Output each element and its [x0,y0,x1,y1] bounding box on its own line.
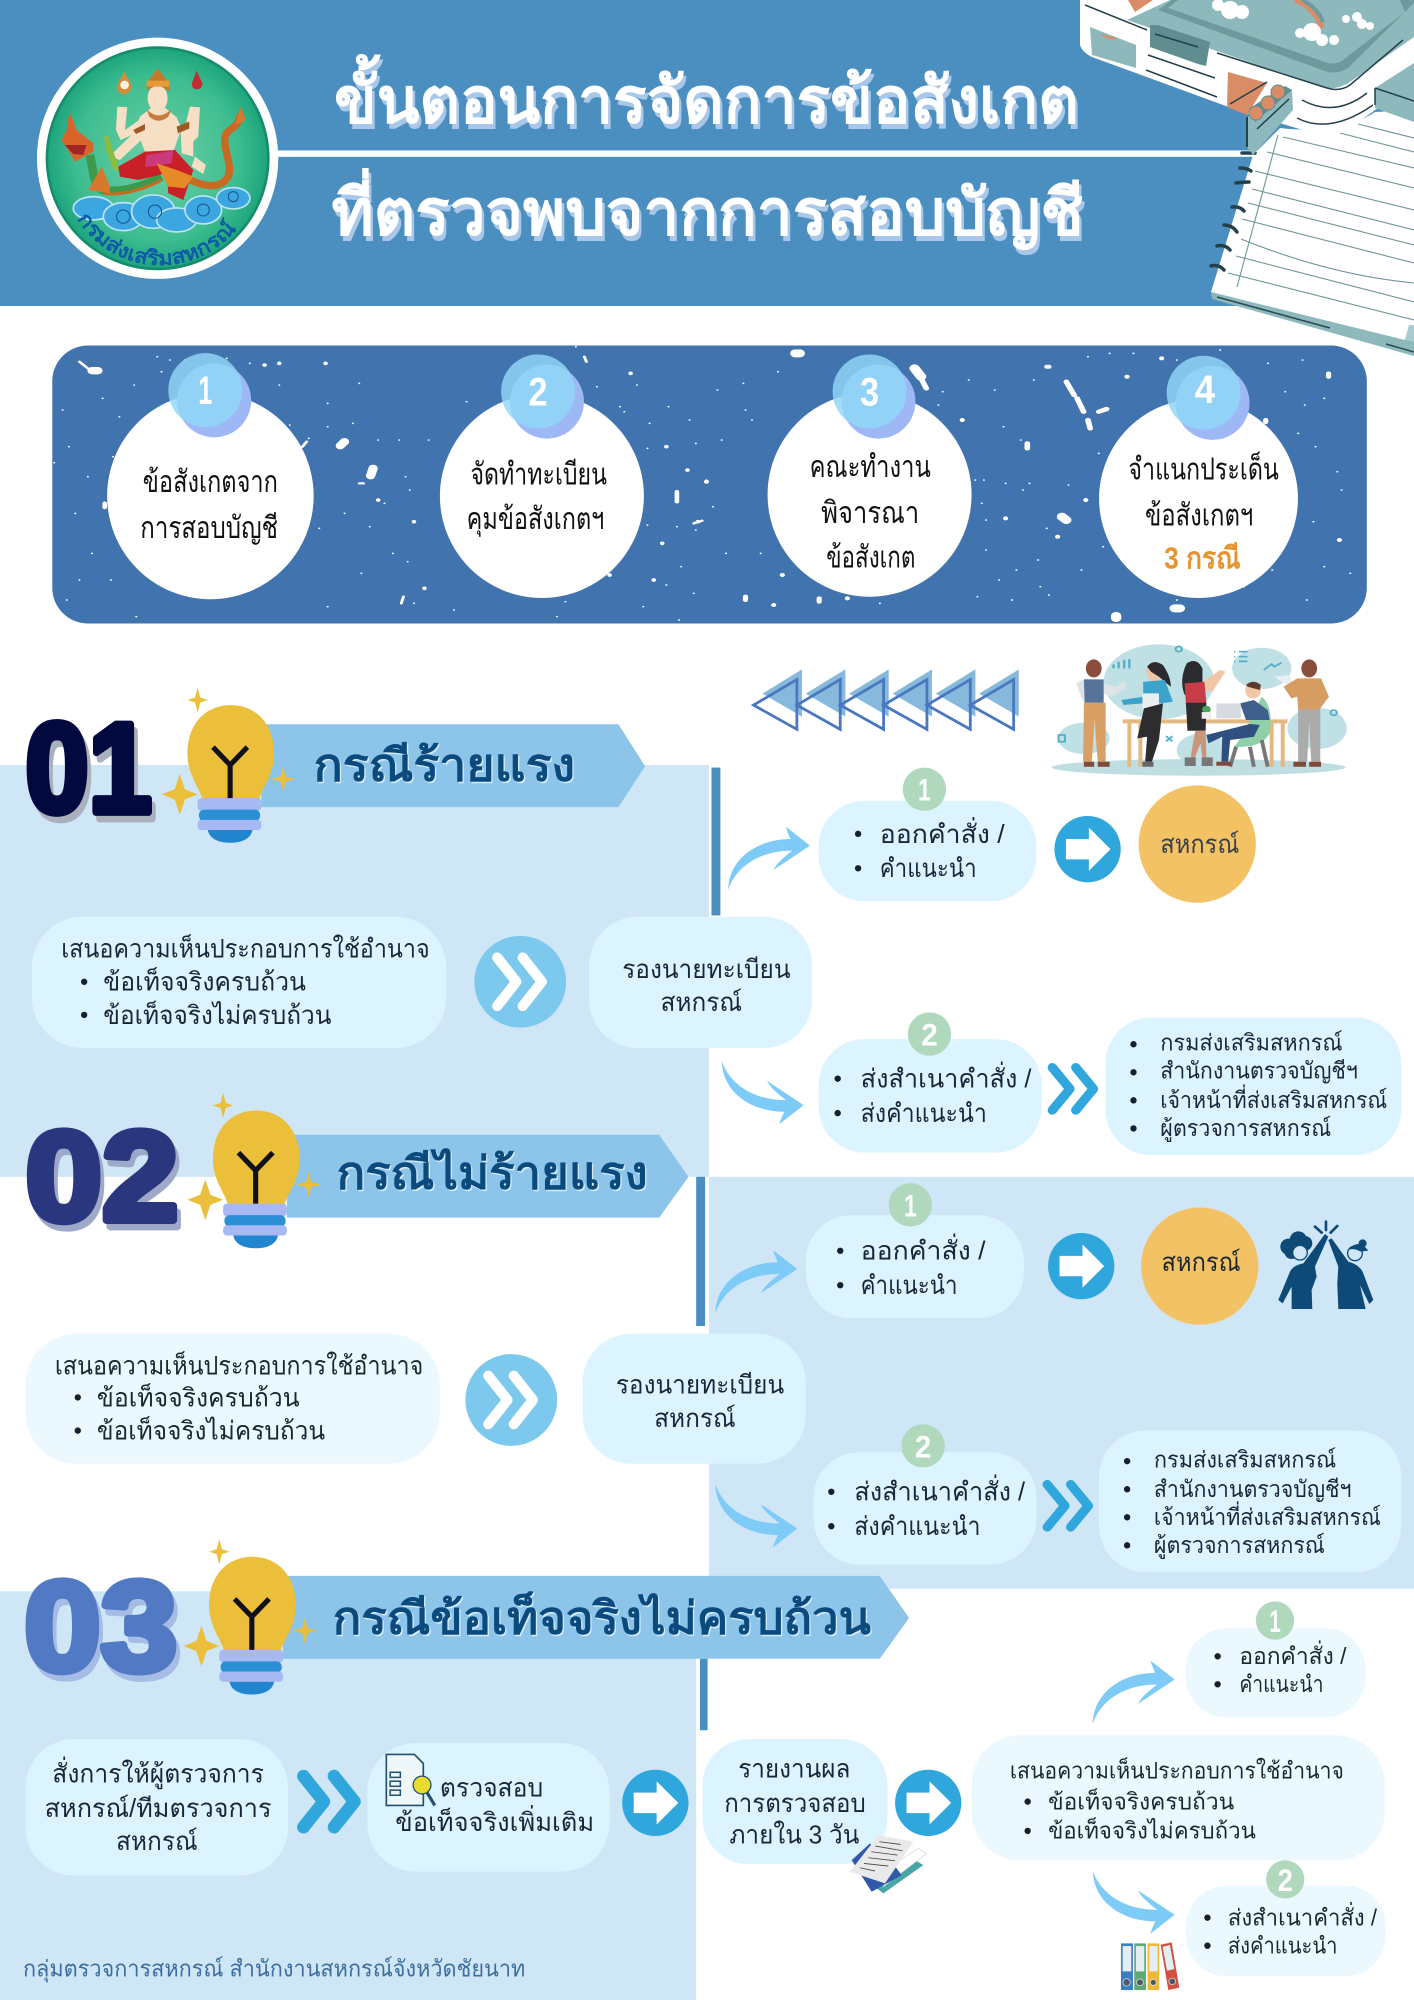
circle: cooperative 01 [1139,785,1256,903]
icon: large chevrons [303,1776,354,1827]
pill: recipients 02: กรมส่งเสริมสหกรณ์ [1154,1447,1336,1473]
rings [1211,153,1255,270]
number 02: 02 [26,1106,179,1248]
pill: order 03: คำแนะนำ [1239,1671,1323,1697]
triangle decoration [754,669,1019,729]
pill: opinion 03: ข้อเท็จจริงไม่ครบถ้วน [1048,1816,1256,1844]
pill: recipients 02: เจ้าหน้าที่ส่งเสริมสหกรณ์ [1154,1501,1381,1530]
step 1: การสอบบัญชี [140,511,278,545]
pill: opinion 02 [26,1334,440,1464]
pill: copy order 02 [813,1452,1037,1564]
badge 2 [1266,1860,1304,1899]
pill: verify facts: ตรวจสอบ [440,1775,543,1803]
circle: cooperative 02 [1141,1207,1258,1325]
clouds [1212,0,1374,46]
step 3 [768,354,972,597]
icon: arrow circle [1054,816,1121,882]
pill: opinion 03: ข้อเท็จจริงครบถ้วน [1048,1786,1235,1814]
pill: recipients 02: ผู้ตรวจการสหกรณ์ [1154,1532,1325,1559]
pill: recipients 02 [1099,1431,1401,1572]
badge 1: 1 [918,772,931,808]
pill: opinion 01: เสนอความเห็นประกอบการใช้อำนาจ [61,934,430,964]
step 1 [107,353,314,599]
pill: recipients 01: กรมส่งเสริมสหกรณ์ [1160,1030,1343,1056]
seated man [1202,682,1271,767]
header band [0,0,1414,306]
step 3: พิจารณา [821,496,919,530]
pill: opinion 03: เสนอความเห็นประกอบการใช้อำนาจ [1010,1756,1344,1784]
badge 2 [908,1012,951,1056]
badge 1 [903,768,946,811]
table [1123,719,1287,723]
pill: order 01: คำแนะนำ [880,855,977,883]
pill: opinion 01: ข้อเท็จจริงครบถ้วน [103,967,306,997]
circle: cooperative 02: สหกรณ์ [1162,1248,1241,1277]
pill: order 01: ออกคำสั่ง / [880,817,1006,849]
badge 1: 1 [1269,1603,1281,1639]
icon: folders [1121,1942,1179,1990]
pill: report: ภายใน 3 วัน [729,1821,859,1850]
icon: chevron circle 01 [474,936,566,1028]
step 4: ข้อสังเกตฯ [1145,498,1253,532]
arrow up 03 [1093,1661,1175,1724]
badge 2: 2 [915,1428,931,1464]
pill: recipients 02: สำนักงานตรวจบัญชีฯ [1154,1476,1352,1502]
pill: recipients 01 [1105,1017,1401,1155]
number 02: 02 [29,1113,182,1255]
pill: recipients 01: สำนักงานตรวจบัญชีฯ [1160,1058,1358,1084]
rainbow [1295,0,1322,28]
badge 2: 2 [921,1017,938,1053]
pill: report: รายงานผล [738,1755,850,1783]
left naga body [90,155,162,191]
badge 1: 1 [904,1187,917,1223]
pill: opinion 02: ข้อเท็จจริงครบถ้วน [97,1382,300,1412]
step 4: 3 กรณี [1164,542,1241,576]
pill: copy order 01: ส่งคำแนะนำ [861,1100,987,1128]
step 3: ข้อสังเกต [826,540,915,574]
number 03: 03 [28,1563,181,1705]
heading ribbon 01: กรณีร้ายแรง [314,740,575,790]
heading ribbon 02: กรณีไม่ร้ายแรง [338,1149,649,1200]
paint specks right [706,350,1350,618]
person 2 [1121,662,1173,767]
number 01: 01 [29,705,156,847]
icon: bulb 02 [187,1093,321,1248]
pill: verify facts: ข้อเท็จจริงเพิ่มเติม [395,1805,594,1837]
number 01: 01 [26,698,152,840]
pill: registrar 02: สหกรณ์ [654,1404,736,1433]
icon: document search [386,1754,435,1805]
pill: registrar 01: รองนายทะเบียน [622,956,791,984]
pill: order 02: คำแนะนำ [861,1272,958,1300]
arrow down 01 [722,1061,804,1124]
pill: opinion 03 [972,1735,1385,1860]
icon: arrow circle [895,1770,961,1836]
heading ribbon 03: กรณีข้อเท็จจริงไม่ครบถ้วน [334,1592,873,1645]
icon: bulb 01 [162,687,296,843]
pill: copy order 03 [1186,1886,1386,1976]
pill: order 01 [819,801,1037,901]
pill: order 02: ออกคำสั่ง / [861,1234,987,1266]
pill: copy order 03: ส่งคำแนะนำ [1228,1932,1337,1958]
arrow up 01 [728,827,810,890]
section 03 [23,1539,1386,1990]
icon: arrow circle [622,1770,689,1836]
pill: copy order 02: ส่งสำเนาคำสั่ง / [854,1475,1026,1507]
deity lower body [118,150,193,200]
divider line [278,150,1260,157]
pill: recipients 01: เจ้าหน้าที่ส่งเสริมสหกรณ์ [1160,1084,1387,1113]
pill: copy order 01 [819,1039,1042,1153]
pill: opinion 01: ข้อเท็จจริงไม่ครบถ้วน [103,1000,332,1030]
step 2 [440,354,644,598]
pill: order 03: ออกคำสั่ง / [1239,1640,1347,1669]
deity arms [110,107,206,174]
icon: papers [850,1835,927,1893]
step 2: จัดทำทะเบียน [470,458,607,492]
circle: cooperative 01: สหกรณ์ [1160,830,1239,859]
heading ribbon 01 [261,724,645,807]
logo: กรมส่งเสริมสหกรณ์ [78,214,236,266]
icon: bulb 03 [184,1539,317,1695]
heading ribbon 03: กรณีข้อเท็จจริงไม่ครบถ้วน [333,1590,871,1643]
step 2: คุมข้อสังเกตฯ [467,502,604,538]
title line 1: ขั้นตอนการจัดการข้อสังเกต [334,53,1079,136]
pill: order inspector [26,1739,288,1876]
clouds [73,188,250,232]
badge 2 [901,1424,945,1468]
pill: report [703,1739,887,1864]
light blue background blocks [0,765,1414,2000]
logo [36,38,278,279]
step 1: ข้อสังเกตจาก [143,465,278,499]
pill: recipients 01: ผู้ตรวจการสหกรณ์ [1160,1115,1331,1142]
badge 2: 2 [1278,1862,1293,1898]
number 03: 03 [24,1556,177,1698]
paint specks left [54,347,706,620]
panel: four steps [52,346,1367,623]
title line 1: ขั้นตอนการจัดการข้อสังเกต [337,59,1081,142]
pill: order 03 [1186,1628,1366,1717]
pill: order inspector: สหกรณ์/ทีมตรวจการ [45,1794,272,1823]
badge 1 [889,1183,932,1227]
arrow up 02 [715,1250,797,1313]
bar 03 [700,1659,708,1730]
icon: chevrons [1052,1068,1093,1110]
pill: opinion 02: เสนอความเห็นประกอบการใช้อำนาจ [55,1350,423,1380]
deity torso [136,105,182,152]
icon: arrow circle [1048,1233,1114,1299]
pill: verify facts [367,1743,609,1872]
pill: registrar 01 [589,917,812,1048]
heading ribbon 02: กรณีไม่ร้ายแรง [337,1147,648,1198]
pill: order 02 [806,1215,1024,1318]
heading ribbon 03 [283,1576,909,1659]
step 4 [1099,356,1298,598]
pill: report: การตรวจสอบ [724,1790,866,1818]
badge 1 [1256,1601,1294,1640]
team illustration [1051,644,1347,776]
heading ribbon 01: กรณีร้ายแรง [315,742,576,792]
person right [1274,659,1329,767]
pill: registrar 01: สหกรณ์ [660,988,742,1017]
bar 01 [711,768,720,915]
pill: copy order 02: ส่งคำแนะนำ [854,1513,980,1541]
pill: opinion 01 [32,917,446,1048]
hand items [117,72,132,94]
title line 2: ที่ตรวจพบจากการสอบบัญชี [332,168,1084,250]
pill: copy order 03: ส่งสำเนาคำสั่ง / [1228,1901,1378,1930]
step 2: 2 [528,370,548,414]
right naga body [187,113,241,186]
heading ribbon 02 [287,1135,689,1218]
notebook illustration [1080,0,1414,356]
pill: order inspector: สั่งการให้ผู้ตรวจการ [52,1756,264,1789]
pill: registrar 02 [583,1334,806,1464]
section 01 [26,687,1401,1155]
title line 2: ที่ตรวจพบจากการสอบบัญชี [334,173,1086,255]
step 3: 3 [860,370,879,414]
step 4: จำแนกประเด็น [1128,450,1279,486]
deity head [148,85,168,112]
step 1: 1 [198,369,212,413]
step 4: 4 [1195,368,1215,412]
paper [1211,110,1414,345]
person left [1076,659,1125,767]
icon: high five [1278,1222,1373,1309]
person 3 [1182,661,1225,766]
pill: copy order 01: ส่งสำเนาคำสั่ง / [861,1062,1032,1094]
pill: order inspector: สหกรณ์ [116,1827,198,1856]
icon: chevron circle 02 [465,1354,557,1446]
section 02 [26,1093,1401,1572]
pill: registrar 02: รองนายทะเบียน [616,1372,784,1400]
pill: opinion 02: ข้อเท็จจริงไม่ครบถ้วน [97,1416,325,1446]
tabs [1150,25,1210,66]
step 3: คณะทำงาน [810,450,931,484]
footer: กลุ่มตรวจการสหกรณ์ สำนักงานสหกรณ์จังหวัดชัยนาท [23,1955,525,1982]
book cover [1080,0,1414,132]
icon: chevrons [1047,1484,1088,1527]
arrow down 03 [1093,1870,1175,1934]
arrow down 02 [715,1484,797,1547]
bar 02 [696,1177,705,1326]
